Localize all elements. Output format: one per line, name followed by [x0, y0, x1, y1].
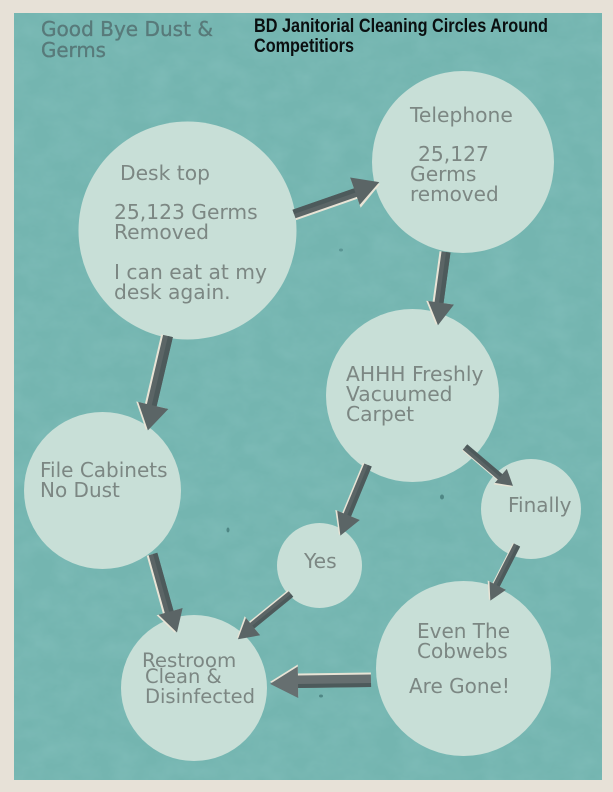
arrow: carpet to yes: [327, 460, 380, 540]
circle: vacuumed carpet: [326, 309, 499, 482]
title: [41, 17, 213, 62]
circle: telephone: 25,127: [418, 142, 489, 166]
arrow: desk top to file cabinets: [130, 332, 185, 434]
circle: cobwebs: Cobwebs: [417, 639, 508, 663]
circle: restroom: Restroom: [142, 649, 236, 672]
circle: desk top: 25,123 Germs: [114, 200, 258, 224]
circle: telephone: Germs: [410, 162, 476, 186]
arrow: yes to restroom: [229, 585, 299, 648]
circle: desk top: [78, 122, 296, 340]
arrow: file cabinets to restroom: [140, 550, 189, 636]
title: Germs: [41, 38, 106, 62]
circle: telephone: Telephone: [409, 103, 513, 127]
circle: file cabinets: [24, 412, 181, 569]
circle: telephone: removed: [410, 182, 499, 206]
subtitle heading: [254, 15, 548, 57]
circle: desk top: Removed: [114, 220, 209, 244]
circle: desk top: Desk top: [120, 161, 210, 185]
circle: vacuumed carpet: Carpet: [346, 402, 414, 426]
circle: restroom: Disinfected: [145, 685, 255, 708]
circle: cobwebs: Are Gone!: [409, 674, 510, 698]
arrow: carpet to finally: [459, 439, 519, 495]
circle: finally: Finally: [508, 493, 572, 517]
circle: yes: [277, 523, 362, 608]
circle: restroom: [121, 615, 267, 761]
circle: cobwebs: [376, 581, 551, 756]
subtitle heading: BD Janitorial Cleaning Circles Around: [254, 15, 548, 37]
arrow: finally to cobwebs: [480, 540, 526, 605]
circle: restroom: Clean &: [145, 665, 222, 688]
circle: yes: Yes: [303, 549, 337, 573]
circle: desk top: desk again.: [114, 280, 231, 304]
circle: file cabinets: No Dust: [40, 478, 120, 502]
circle: finally: [481, 459, 581, 559]
circle: desk top: I can eat at my: [114, 260, 267, 284]
circle: vacuumed carpet: AHHH Freshly: [346, 362, 483, 386]
circle: telephone: [372, 71, 554, 253]
circle: vacuumed carpet: Vacuumed: [346, 382, 453, 406]
circle: file cabinets: File Cabinets: [40, 458, 168, 482]
subtitle heading: Competitiors: [254, 35, 354, 57]
arrow: telephone to carpet: [423, 250, 461, 327]
circle: cobwebs: Even The: [417, 619, 510, 643]
arrow: desk top to telephone: [289, 169, 385, 229]
title: Good Bye Dust &: [41, 17, 213, 41]
arrow: cobwebs to restroom: [270, 664, 371, 698]
